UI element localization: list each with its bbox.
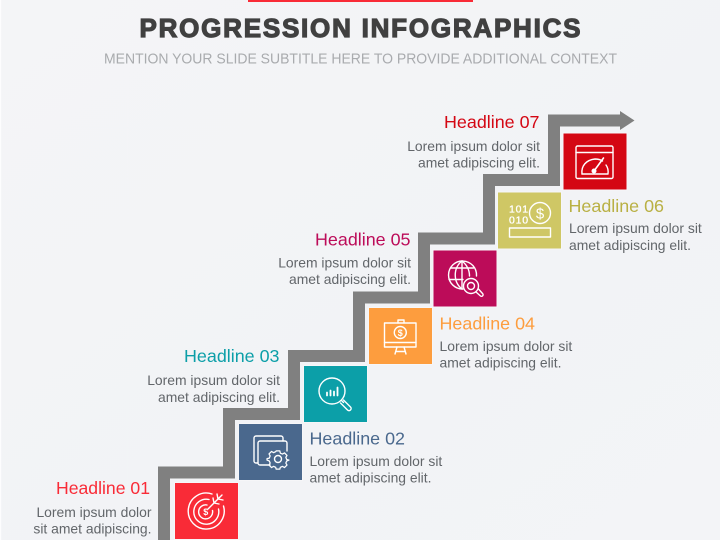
- text 03: amet adipiscing elit.: [158, 389, 280, 405]
- step 05 square: [433, 250, 497, 307]
- top accent bar: [248, 0, 473, 2]
- text 04: amet adipiscing elit.: [440, 354, 562, 370]
- icon: browser window with gauge: [576, 146, 613, 178]
- text 04: Lorem ipsum dolor sit: [440, 338, 572, 354]
- icon: presentation board with dollar: $: [398, 328, 403, 338]
- headline 05: Headline 05: [315, 230, 411, 250]
- icon: presentation board with dollar: [384, 320, 416, 354]
- step 03 square: [304, 366, 368, 422]
- icon: binary code and coin: 010: [509, 214, 529, 226]
- step 02 square: [238, 424, 302, 480]
- text 07: amet adipiscing elit.: [418, 154, 540, 170]
- text 05: Lorem ipsum dolor sit: [278, 254, 411, 270]
- step 07 square: [563, 133, 627, 190]
- title: PROGRESSION INFOGRAPHICS: [140, 13, 580, 43]
- text 07: Lorem ipsum dolor sit: [407, 138, 540, 154]
- step 03: [147, 346, 368, 422]
- icon: windows with gear: [254, 436, 289, 469]
- subtitle: MENTION YOUR SLIDE SUBTITLE HERE TO PROVIDE ADDITIONAL CONTEXT: [104, 52, 617, 68]
- step 02: [238, 424, 442, 486]
- headline 03: Headline 03: [184, 346, 280, 366]
- text 05: amet adipiscing elit.: [289, 271, 411, 287]
- icon: magnifier with bars: [319, 378, 351, 411]
- text 06: amet adipiscing elit.: [569, 237, 691, 253]
- step 01 square: [174, 482, 238, 540]
- step 05: [278, 230, 497, 307]
- text 06: Lorem ipsum dolor sit: [569, 220, 702, 236]
- icon: binary code and coin: [509, 202, 550, 237]
- headline 01: Headline 01: [56, 478, 150, 498]
- step 06 square: [498, 192, 562, 249]
- text 01: Lorem ipsum dolor: [36, 504, 152, 520]
- text 03: Lorem ipsum dolor sit: [147, 372, 280, 388]
- icon: target with dollar: $: [203, 507, 208, 517]
- headline 07: Headline 07: [444, 112, 540, 132]
- text 01: sit amet adipiscing.: [33, 520, 152, 536]
- staircase arrow: [164, 111, 634, 540]
- step 04: [368, 308, 572, 370]
- headline 04: Headline 04: [440, 314, 535, 334]
- icon: target with dollar: [188, 493, 224, 529]
- icon: globe with magnifier: [449, 261, 483, 296]
- text 02: amet adipiscing elit.: [310, 470, 432, 486]
- step 01: [33, 478, 238, 540]
- headline 02: Headline 02: [310, 428, 405, 448]
- step 06: [498, 192, 702, 253]
- icon: binary code and coin: $: [536, 206, 545, 222]
- headline 06: Headline 06: [568, 196, 664, 216]
- icon: binary code and coin: 101: [509, 204, 529, 216]
- step 07: [407, 112, 627, 190]
- text 02: Lorem ipsum dolor sit: [310, 453, 442, 469]
- step 04 square: [368, 308, 432, 364]
